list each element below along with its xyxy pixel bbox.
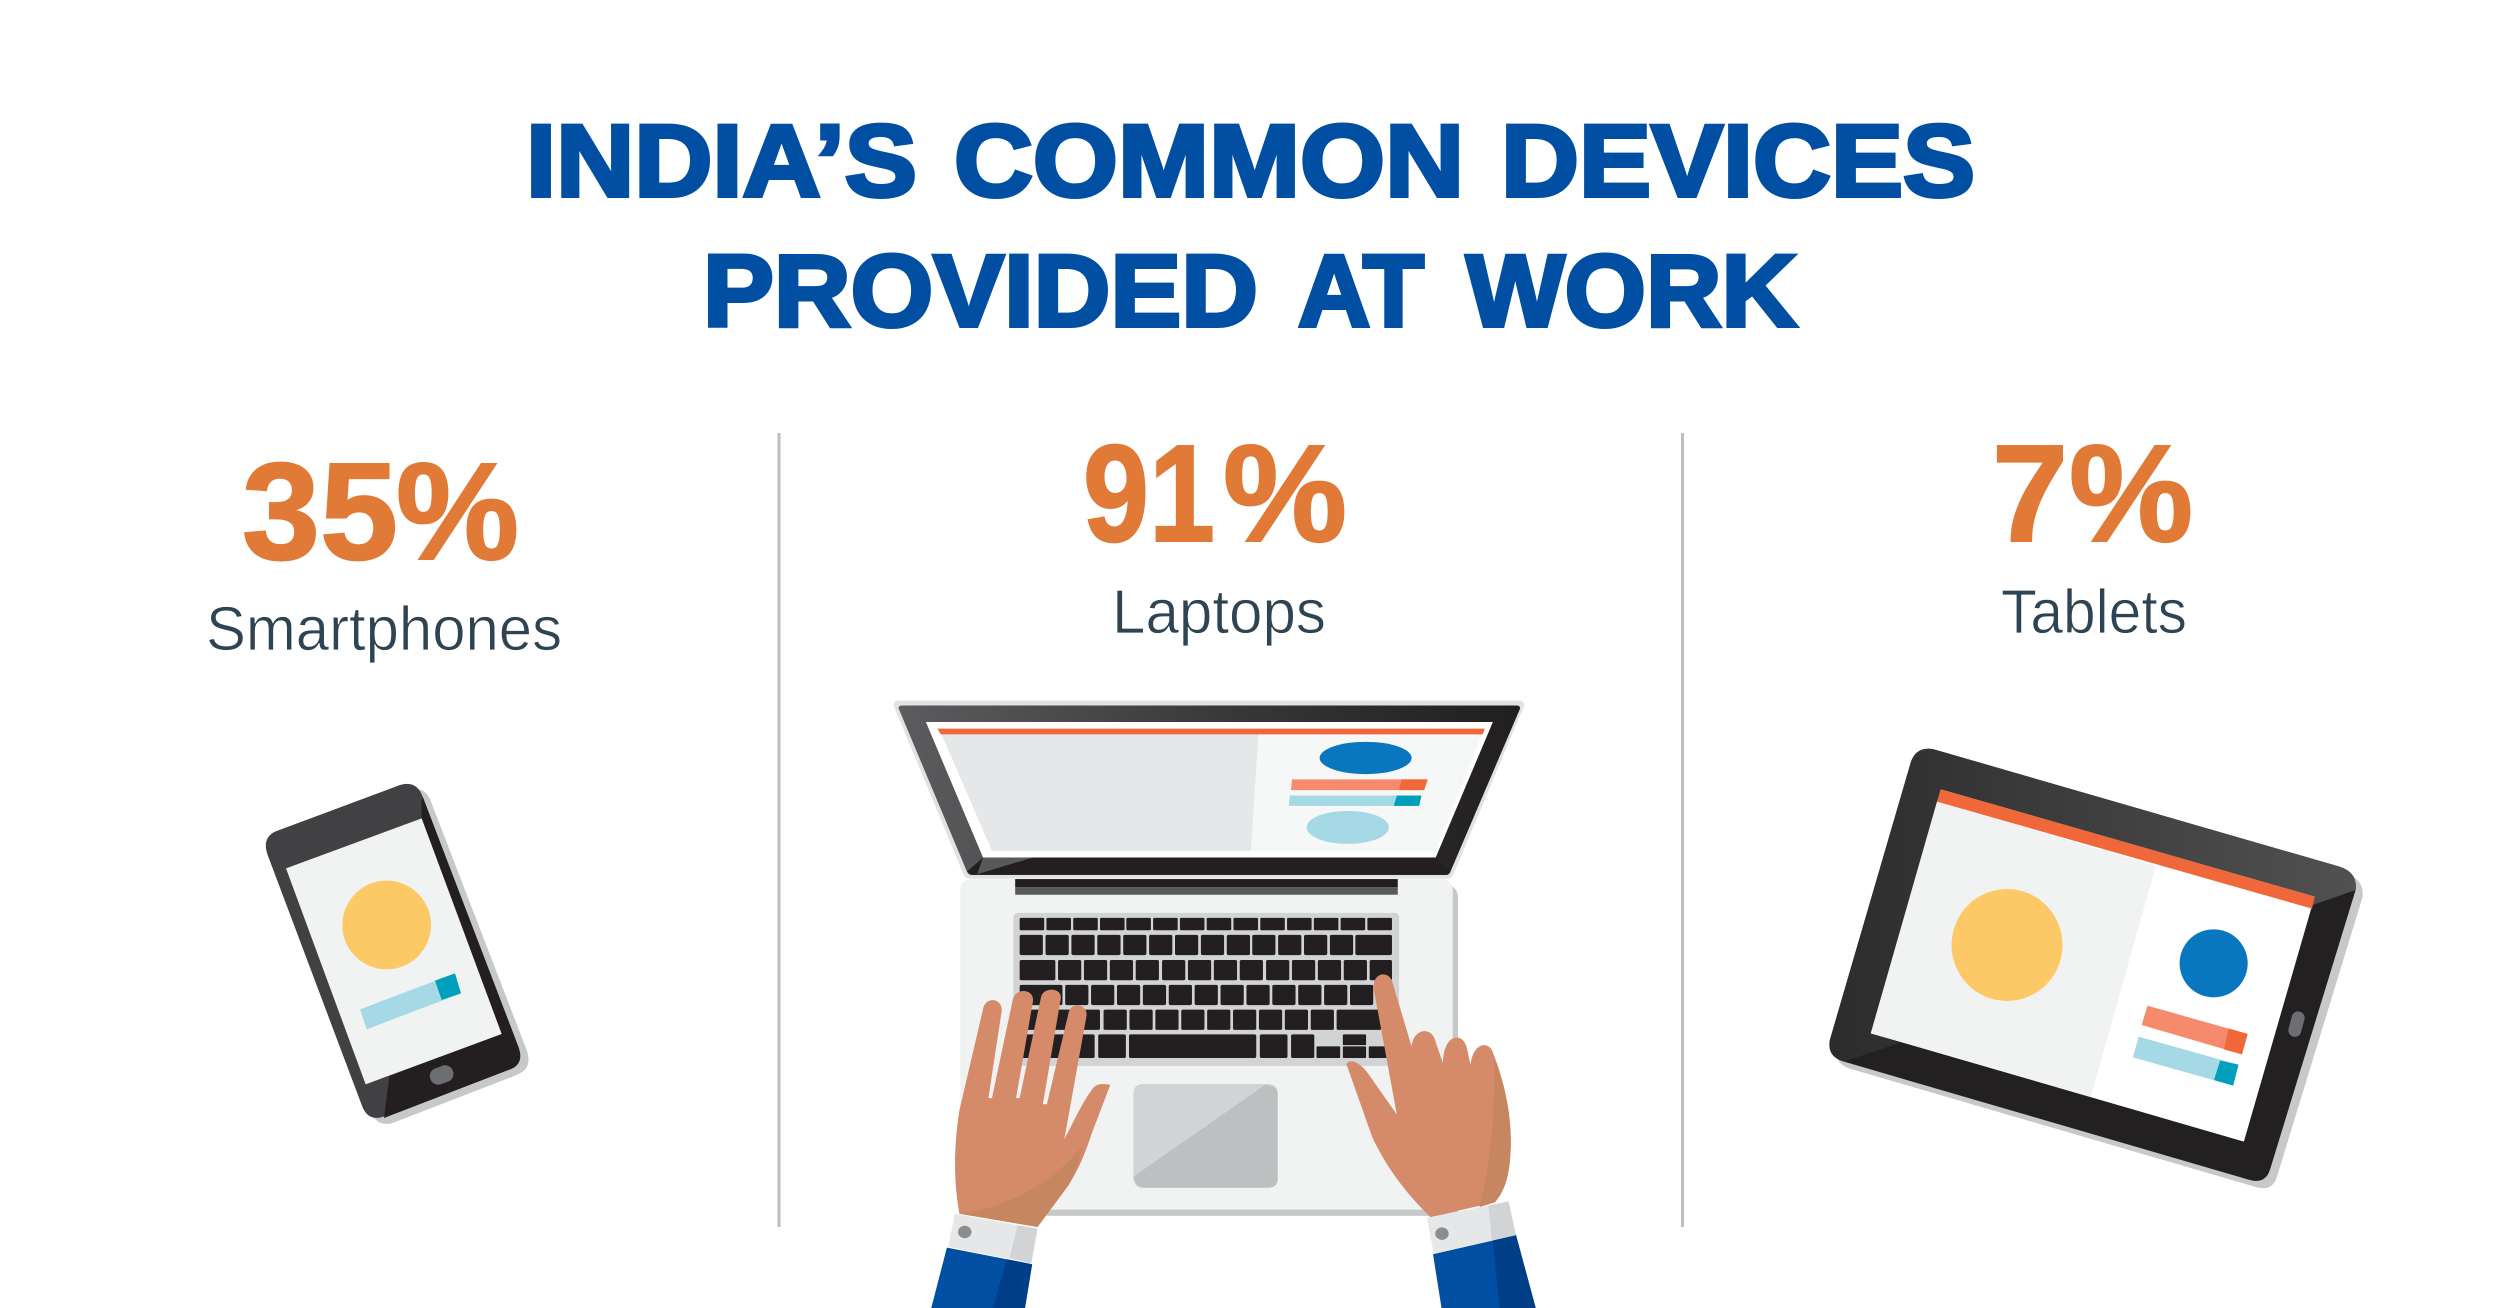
left hand bbox=[931, 990, 1110, 1308]
laptop base bbox=[960, 879, 1458, 1216]
stat: 91%: 91 bbox=[1083, 417, 1215, 571]
icon: smartphone bbox=[266, 784, 529, 1124]
hinge bbox=[1015, 879, 1398, 895]
panel: laptops bbox=[894, 417, 1536, 1308]
right hand bbox=[1346, 974, 1536, 1308]
divider left bbox=[778, 433, 780, 1227]
title: COMMON bbox=[954, 104, 1464, 218]
stat: 7%: 7 bbox=[1992, 417, 2068, 571]
stat: 7% bbox=[1992, 417, 2193, 571]
stat: 35%: 35 bbox=[242, 435, 398, 589]
icon: tablet bbox=[1829, 749, 2363, 1188]
keyboard bbox=[1013, 913, 1399, 1066]
stat: 7%: % bbox=[2069, 417, 2193, 571]
panel: tablets bbox=[1829, 417, 2363, 1188]
title: AT bbox=[1298, 234, 1424, 348]
title: DEVICES bbox=[1501, 104, 1975, 218]
trackpad bbox=[1133, 1084, 1278, 1188]
stat: 35%: % bbox=[396, 435, 519, 589]
label: Laptops: Laptops bbox=[1112, 578, 1326, 647]
title: PROVIDED bbox=[703, 234, 1258, 348]
panel: smartphones bbox=[206, 435, 562, 1124]
stat: 35% bbox=[242, 435, 519, 589]
title: INDIA’S bbox=[526, 104, 917, 218]
laptop lid bbox=[894, 701, 1524, 879]
label: Tablets: Tablets bbox=[2001, 578, 2187, 647]
title bbox=[526, 104, 1975, 348]
stat: 91% bbox=[1083, 417, 1347, 571]
label: Smartphones: Smartphones bbox=[206, 595, 562, 664]
stat: 91%: % bbox=[1223, 417, 1347, 571]
title: WORK bbox=[1466, 234, 1797, 348]
divider right bbox=[1681, 433, 1684, 1227]
icon: laptop with hands bbox=[894, 701, 1536, 1308]
